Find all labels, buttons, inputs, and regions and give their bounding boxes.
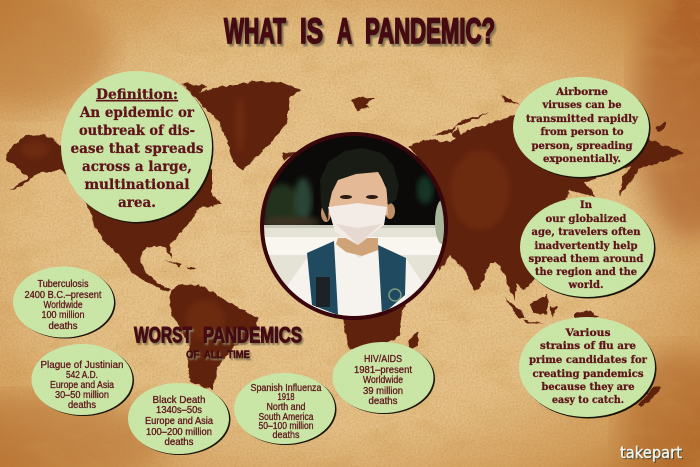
- panel: hiv/aids: Worldwide: [363, 375, 403, 386]
- panel: flu strains bubble: because they are: [542, 381, 635, 393]
- map: Africa: [340, 250, 450, 350]
- panel: definition bubble: multinational: [84, 177, 190, 193]
- title: [224, 12, 497, 54]
- panel: spanish influenza: deaths: [272, 430, 300, 441]
- panel: plague of justinian: 542 A.D.: [66, 370, 98, 381]
- panel: plague of justinian: deaths: [68, 400, 96, 411]
- panel: flu strains bubble: strains of flu are: [540, 340, 636, 352]
- panel: tuberculosis: [13, 266, 116, 338]
- panel: globalized age bubble: world.: [568, 279, 604, 291]
- mask: [328, 203, 387, 245]
- panel: globalized age bubble: In: [580, 199, 592, 211]
- panel: tuberculosis: deaths: [48, 321, 78, 332]
- panel: black death: Europe and Asia: [145, 416, 213, 427]
- map: Britain and Iceland: [282, 97, 375, 160]
- panel: definition bubble: [61, 71, 214, 224]
- panel: airborne bubble: from person to: [540, 126, 624, 138]
- panel: flu strains bubble: easy to catch.: [552, 394, 624, 406]
- panel: spanish influenza: [234, 373, 336, 445]
- panel: plague of justinian: Europe and Asia: [50, 380, 114, 391]
- panel: spanish influenza: 1918: [278, 392, 295, 403]
- world map: [6, 81, 684, 407]
- panel: plague of justinian: [32, 344, 134, 416]
- heading: worst pandemics of all time: WORST: [134, 322, 192, 348]
- panel: black death: 1340s–50s: [156, 405, 202, 416]
- backpack strap left: [307, 241, 338, 315]
- panel: spanish influenza: South America: [258, 412, 314, 423]
- panel: flu strains bubble: [519, 317, 656, 418]
- panel: airborne bubble: transmitted rapidly: [526, 113, 639, 125]
- panel: definition bubble: Definition:: [96, 87, 178, 103]
- panel: spanish influenza: North and: [266, 402, 306, 413]
- heading: worst pandemics of all time: OF ALL TIME: [188, 351, 252, 363]
- heading: worst pandemics of all time: PANDEMICS: [203, 322, 302, 348]
- title: PANDEMIC?: [367, 14, 497, 54]
- shirt: [288, 255, 423, 316]
- panel: tuberculosis: 100 million: [42, 310, 84, 321]
- map: North America: [6, 135, 222, 292]
- panel: definition bubble: ease that spreads: [70, 141, 204, 157]
- panel: definition bubble: outbreak of dis-: [79, 123, 195, 139]
- panel: globalized age bubble: inadvertently help: [534, 240, 638, 252]
- title: IS: [300, 12, 323, 51]
- title: WHAT: [226, 14, 288, 54]
- map: New Zealand: [638, 386, 661, 407]
- panel: spanish influenza: 50–100 million: [258, 421, 314, 432]
- panel: globalized age bubble: age, travelers often: [532, 226, 641, 238]
- title: A: [339, 14, 354, 54]
- map: Caribbean islands: [165, 260, 196, 270]
- panel: flu strains bubble: creating pandemics: [532, 368, 644, 380]
- panel: globalized age bubble: [520, 197, 656, 298]
- panel: plague of justinian: 30–50 million: [55, 390, 109, 401]
- face: [328, 170, 388, 215]
- panel: airborne bubble: Airborne: [555, 86, 608, 98]
- map: South America: [170, 284, 258, 390]
- heading: worst pandemics of all time: OF ALL TIME: [186, 349, 250, 361]
- panel: globalized age bubble: the region and the: [535, 266, 637, 278]
- panel: flu strains bubble: Various: [564, 327, 611, 339]
- panel: tuberculosis: 2400 B.C.–present: [24, 290, 102, 301]
- map mottling: [21, 97, 510, 340]
- panel: black death: deaths: [164, 437, 194, 448]
- title: A: [337, 12, 352, 51]
- photo: child wearing a face mask: [260, 132, 450, 325]
- panel: flu strains bubble: prime candidates for: [529, 354, 647, 366]
- heading: worst pandemics of all time: [134, 322, 304, 363]
- panel: spanish influenza: Spanish Influenza: [250, 383, 322, 394]
- heading: worst pandemics of all time: WORST: [136, 324, 194, 350]
- panel: airborne bubble: person, spreading: [532, 140, 633, 152]
- hair: [320, 148, 399, 221]
- panel: black death: Black Death: [152, 395, 206, 406]
- panel: airborne bubble: [513, 77, 650, 178]
- title: WHAT: [224, 12, 286, 51]
- panel: hiv/aids: HIV/AIDS: [364, 354, 402, 365]
- panel: airborne bubble: exponentially.: [543, 153, 621, 165]
- title: IS: [302, 14, 325, 54]
- panel: plague of justinian: Plague of Justinian: [40, 360, 124, 371]
- backpack strap right: [378, 245, 406, 315]
- map: Eurasia: [408, 110, 684, 300]
- buckle ring: [389, 289, 401, 301]
- panel: black death: 100–200 million: [146, 427, 212, 438]
- panel: hiv/aids: [332, 342, 435, 414]
- map: Scandinavia and Arctic islands: [432, 95, 666, 144]
- panel: tuberculosis: Tuberculosis: [38, 279, 88, 290]
- panel: definition bubble: area.: [118, 195, 156, 211]
- map: Greenland: [182, 81, 302, 170]
- title: PANDEMIC?: [365, 12, 495, 51]
- panel: globalized age bubble: spread them around: [528, 253, 644, 265]
- map: Madagascar: [408, 332, 418, 350]
- panel: hiv/aids: deaths: [368, 396, 398, 407]
- heading: worst pandemics of all time: PANDEMICS: [204, 324, 304, 350]
- panel: black death: [128, 383, 230, 455]
- panel: globalized age bubble: our globalized: [546, 213, 627, 225]
- map: Indonesia and New Guinea: [505, 294, 600, 324]
- panel: definition bubble: An epidemic or: [79, 105, 195, 121]
- panel: airborne bubble: viruses can be: [542, 99, 622, 111]
- ears: [321, 208, 331, 222]
- panel: definition bubble: across a large,: [82, 159, 192, 175]
- logo: takepart: takepart: [620, 443, 682, 462]
- neck: [336, 238, 378, 256]
- panel: tuberculosis: Worldwide: [44, 300, 83, 311]
- logo: takepart: takepart: [621, 444, 683, 463]
- panel: hiv/aids: 39 million: [363, 386, 403, 397]
- panel: hiv/aids: 1981–present: [354, 365, 412, 376]
